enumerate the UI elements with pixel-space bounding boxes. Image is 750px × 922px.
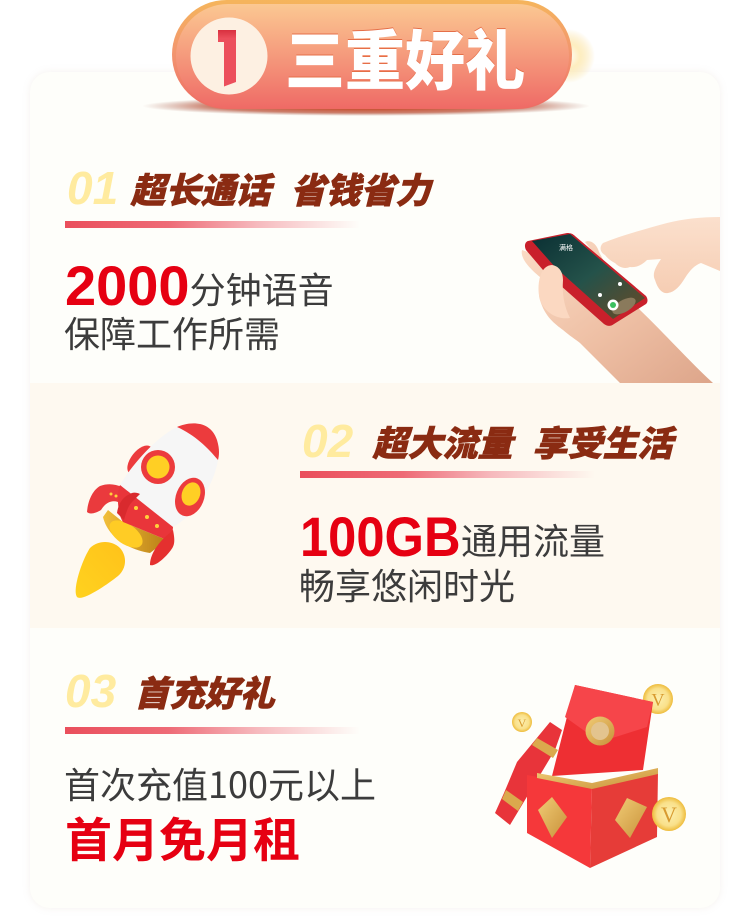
gradient rule — [300, 471, 595, 478]
body text 01: 保障工作所需 — [64, 306, 280, 358]
emblem right — [615, 798, 647, 838]
heading 02: 超大流量 享受生活 — [370, 416, 683, 467]
box body — [527, 768, 658, 868]
nozzle — [103, 510, 167, 553]
body text 02: 畅享悠闲时光 — [299, 558, 515, 610]
right fin — [150, 530, 174, 565]
illustration: red gift box — [495, 684, 686, 868]
phone screen — [532, 234, 645, 319]
phone screen: 满格 — [559, 243, 573, 253]
dots — [110, 492, 159, 528]
panel: middle band background — [30, 383, 720, 628]
rear window — [122, 441, 158, 479]
left fin — [87, 484, 130, 513]
title badge — [146, 0, 594, 116]
arm and palm — [522, 241, 713, 383]
heading 01: 超长通话 省钱省力 — [128, 163, 441, 214]
body text 01: 2000分钟语音 — [65, 254, 334, 317]
box lid — [495, 722, 562, 825]
illustration: rocket — [76, 423, 219, 598]
coin top right — [643, 684, 673, 714]
body text 01 — [64, 254, 334, 358]
illustration: hand holding phone — [522, 217, 720, 383]
badge glow — [541, 29, 595, 83]
body text 02 — [299, 505, 605, 610]
coin top left — [512, 712, 532, 732]
shadow under badge — [142, 96, 590, 116]
section 03: first recharge — [64, 665, 376, 871]
rear red band — [118, 485, 173, 540]
pointing hand — [601, 217, 720, 293]
coin right — [652, 797, 686, 831]
nose cone — [177, 423, 219, 460]
badge pill — [172, 0, 572, 109]
emblem left — [538, 797, 567, 838]
gradient rule — [65, 221, 360, 228]
flame — [76, 542, 125, 598]
section 02: big data — [299, 415, 683, 610]
number 03: 03 — [65, 665, 116, 717]
rocket body — [120, 424, 219, 527]
window 1 — [141, 450, 175, 484]
body text 03: 首次充值100元以上 — [64, 757, 376, 809]
heading 03: 首充好礼 — [132, 666, 284, 717]
body text 03 — [64, 757, 376, 871]
number circle — [190, 18, 268, 94]
middle fin — [117, 493, 140, 520]
number 02: 02 — [302, 415, 353, 467]
section 01: long calls — [64, 162, 441, 358]
title text: 三重好礼 — [285, 9, 525, 103]
phone body — [525, 233, 648, 326]
red envelope — [552, 685, 653, 776]
coin top left: V — [518, 716, 527, 730]
body text 02: 100GB — [300, 505, 461, 568]
coin right: V — [661, 802, 677, 827]
number 01: 01 — [67, 162, 118, 214]
coin top right: V — [652, 690, 664, 710]
body text 03: 首月免月租 — [65, 802, 300, 871]
thumb — [538, 265, 570, 318]
window 2 — [170, 473, 210, 521]
body text 02: 通用流量 — [461, 513, 605, 565]
gradient rule — [65, 727, 360, 734]
